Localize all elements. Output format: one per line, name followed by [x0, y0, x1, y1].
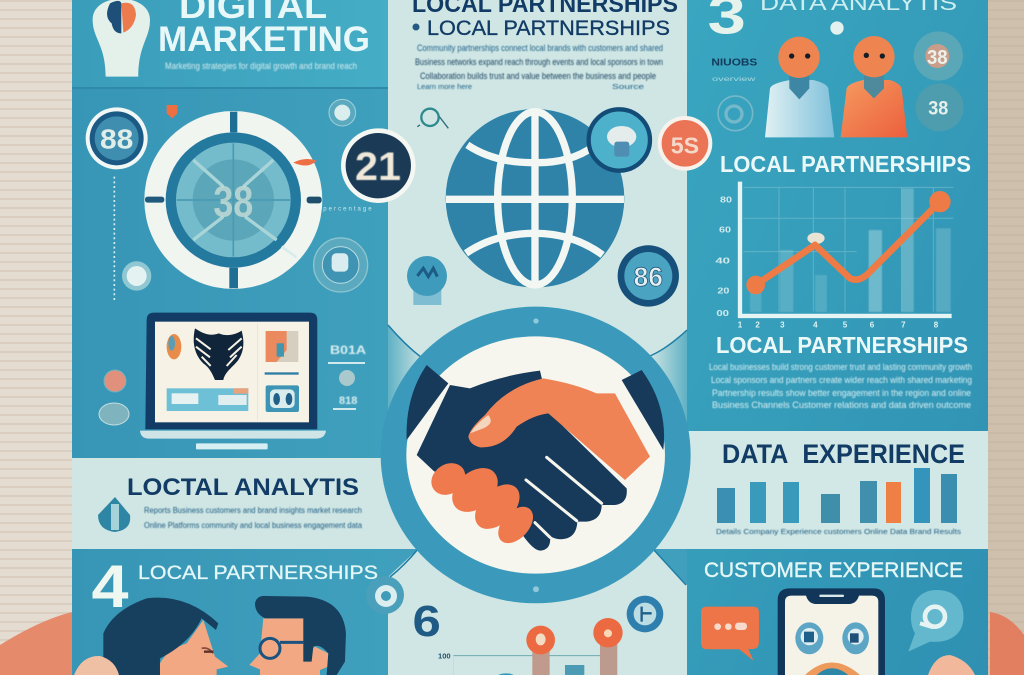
- icon: lower right badge: [314, 238, 368, 292]
- centre base behind handshake: [388, 320, 687, 590]
- description text: Reports Business customers and brand insights market research: [144, 506, 362, 515]
- icon: small mixed badge: [99, 403, 129, 425]
- person: right: [841, 36, 907, 137]
- left column badges: [86, 99, 416, 300]
- phone icons: [795, 622, 869, 654]
- local partnerships headings centre: LOCAL PARTNERSHIPS: [427, 17, 670, 40]
- header: digital marketing: MARKETING: [158, 20, 370, 59]
- badge: blue globe icon: [589, 109, 650, 171]
- description text: Business networks expand reach through events and local sponsors in town: [415, 57, 663, 67]
- speech bubble: teal: [908, 590, 964, 652]
- badge: 88: 86: [634, 262, 663, 292]
- laptop section: [140, 313, 326, 449]
- badge: 18: 88: [100, 123, 133, 154]
- heading and text: local partnerships lower right: Partnership results show better engagement in the region and online: [712, 388, 971, 398]
- description text: Collaboration builds trust and value between the business and people: [420, 71, 656, 81]
- panel: local analytics: Online Platforms community and local business engagement data: [144, 521, 363, 530]
- target chart: percentage: [323, 207, 372, 213]
- badge: orange: 5S: [671, 132, 699, 158]
- chart centre labels: 38: [213, 179, 253, 227]
- badge: 38: 38: [928, 99, 949, 120]
- man: [249, 596, 346, 675]
- icon: teal drop: [98, 497, 130, 532]
- chart axes: [740, 182, 952, 316]
- badge: 21: [341, 128, 416, 203]
- heading: DATA EXPERIENCE: [722, 439, 965, 469]
- hands holding the poster: [0, 612, 1024, 675]
- icon: small ring at top: [417, 109, 448, 128]
- hand: right thumb: [928, 655, 975, 675]
- heading: customer experience: CUSTOMER EXPERIENCE: [704, 559, 963, 582]
- badge: 88: [618, 245, 679, 307]
- fingers: [425, 457, 540, 550]
- line chart: [715, 182, 953, 329]
- chart axis labels: 20: [717, 285, 730, 295]
- number 5: 6: [412, 598, 441, 646]
- badge: 18: [86, 107, 148, 169]
- chart axis labels: [715, 195, 732, 318]
- hand: left thumb: [74, 656, 119, 675]
- badge: orange: [658, 116, 712, 171]
- icon: orange shield: [167, 105, 177, 118]
- emblem ring: [381, 307, 691, 603]
- phone: [701, 588, 964, 675]
- chart line: [453, 654, 600, 657]
- badge: 38: [916, 83, 964, 131]
- side label: NIUOBS: [711, 57, 758, 68]
- line chart: 1: [738, 320, 743, 329]
- dark cuff right: [622, 370, 664, 450]
- chart axis labels: 00: [716, 308, 729, 318]
- handshake emblem: [381, 307, 691, 603]
- icon: teal cylinder: [407, 256, 447, 305]
- icon: blue badge: [627, 596, 663, 632]
- chart axis labels: 40: [715, 255, 730, 265]
- finger gaps: [526, 457, 602, 537]
- heading and text: local partnerships lower right: Business Channels Customer relations and data driven outcome: [712, 400, 971, 410]
- side label: [711, 57, 758, 83]
- heading and text: local partnerships lower right: Local sponsors and partners create wider reach with shared marketing: [711, 375, 972, 385]
- side label: overview: [712, 76, 756, 83]
- heading: LOCAL PARTNERSHIPS: [138, 563, 378, 584]
- section 5: number and chart: 100: [438, 652, 451, 661]
- icon: light bulb: [93, 0, 150, 77]
- chart trend line: [746, 191, 951, 294]
- section 4: local partnerships: [92, 553, 404, 675]
- poster panel: centre pale column: [388, 0, 687, 365]
- heading: local partnerships right: LOCAL PARTNERSHIPS: [720, 151, 971, 177]
- poster panel: left blue column: [72, 0, 392, 675]
- woman: [103, 598, 228, 675]
- header: digital marketing: [93, 0, 370, 77]
- description text: [415, 43, 663, 91]
- laptop side labels and icons: 818: [339, 395, 357, 407]
- subtitle: Marketing strategies for digital growth and brand reach: [165, 61, 357, 71]
- local partnerships headings centre: [412, 0, 678, 91]
- bar chart: [716, 468, 961, 536]
- line chart: 5: [843, 320, 848, 329]
- chart grid: [743, 187, 953, 312]
- laptop screen eagle: [194, 328, 243, 380]
- dark hand: [417, 371, 627, 551]
- light wedges beside the handshake: [388, 325, 687, 460]
- chart axis labels: 60: [719, 225, 731, 235]
- badge: 30: 38: [927, 47, 948, 69]
- speech bubble: orange: [701, 607, 759, 661]
- centre lower pale area: [388, 549, 687, 675]
- laptop side labels and icons: B01A: [330, 343, 366, 357]
- panel: local analytics: [72, 458, 417, 549]
- screen orange tile: [266, 331, 298, 362]
- badge: shield icon: [366, 576, 404, 614]
- icon: small top badge: [329, 99, 356, 126]
- line chart: 8: [934, 320, 939, 329]
- line chart: 4: [813, 320, 818, 329]
- number 4: 4: [92, 553, 129, 620]
- icon: lower left badge: [122, 261, 151, 291]
- description text: Community partnerships connect local brands with customers and shared: [417, 43, 663, 53]
- dotted line: [112, 177, 117, 300]
- line chart: 2: [755, 320, 760, 329]
- laptop side labels and icons: [99, 343, 366, 425]
- section 3: data analytics: [707, 0, 964, 137]
- lollipop bars: [497, 618, 623, 675]
- section 5: number and chart: [412, 596, 663, 675]
- heading: LOCTAL ANALYTIS: [127, 474, 359, 501]
- description text: Source: [612, 84, 644, 91]
- chart axis labels: 80: [720, 195, 732, 205]
- screen blue strip: [167, 388, 248, 411]
- screen icon tile: [266, 385, 299, 412]
- icon: coral circle: [104, 370, 126, 392]
- icon: swirl: [718, 96, 753, 131]
- line chart: 6: [870, 320, 875, 329]
- line chart: 7: [901, 320, 906, 329]
- people faces: [103, 596, 346, 675]
- poster panel: right blue column: [684, 0, 988, 675]
- screen oval: [167, 334, 181, 359]
- dark cuff left: [407, 365, 448, 440]
- number 21 label: 21: [355, 145, 401, 189]
- hand: left palm: [0, 612, 72, 675]
- heading and text: local partnerships lower right: Local businesses build strong customer trust and lasting community growth: [709, 362, 972, 372]
- person: left: [765, 37, 834, 137]
- badge: 30: [914, 31, 963, 81]
- orange hand: [468, 378, 650, 480]
- description text: Learn more here: [417, 84, 472, 91]
- line chart: 3: [780, 320, 785, 329]
- chart bars: [750, 188, 951, 312]
- globe: [407, 109, 712, 307]
- heading and text: local partnerships lower right: [709, 332, 972, 410]
- panel: data experience: [650, 431, 988, 549]
- bar chart: Details Company Experience customers Online Data Brand Results: [716, 527, 961, 536]
- heading and text: local partnerships lower right: LOCAL PARTNERSHIPS: [716, 332, 968, 358]
- target chart: [144, 111, 372, 289]
- hand: right palm: [990, 612, 1024, 675]
